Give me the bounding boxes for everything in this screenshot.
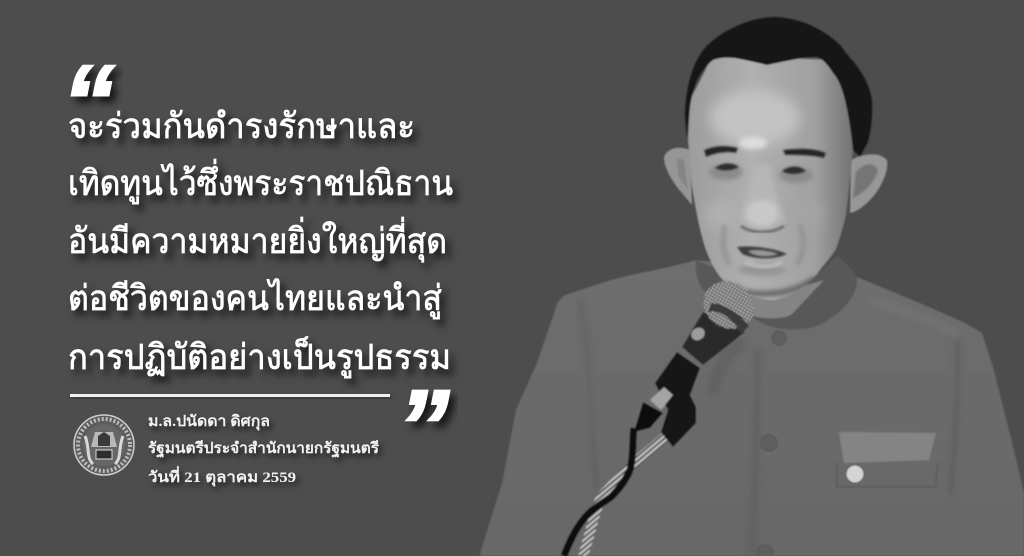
cable — [564, 428, 634, 556]
pin — [846, 465, 864, 483]
gooseneck — [583, 432, 671, 556]
opening quote mark: “ — [62, 44, 115, 161]
mouth — [737, 246, 787, 266]
quote text: อันมีความหมายยิ่งใหญ่ที่สุด — [68, 217, 447, 262]
attribution text: รัฐมนตรีประจำสำนักนายกรัฐมนตรี — [148, 440, 380, 458]
quote text: ต่อชีวิตของคนไทยและนำสู่ — [68, 278, 442, 319]
forehead highlight — [710, 90, 800, 146]
quote text: จะร่วมกันดำรงรักษาและ — [68, 107, 415, 146]
smile lines and chin — [723, 225, 803, 265]
neck — [722, 280, 824, 318]
microphone head — [695, 272, 763, 338]
microphone plug — [634, 402, 663, 432]
divider line — [70, 394, 390, 397]
nose shading — [762, 168, 784, 224]
face — [686, 56, 854, 300]
pocket square — [839, 432, 936, 463]
left ear — [664, 148, 692, 205]
closing quote mark: ” — [397, 369, 450, 486]
quote text: เทิดทูนไว้ซึ่งพระราชปณิธาน — [68, 159, 453, 204]
person photo — [470, 17, 1024, 556]
buttons — [757, 331, 786, 556]
microphone body — [682, 312, 745, 365]
quote text: การปฏิบัติอย่างเป็นรูปธรรม — [68, 336, 451, 378]
collar — [696, 256, 857, 330]
eyes — [715, 163, 806, 174]
hair — [685, 17, 872, 157]
microphone connector — [650, 387, 673, 410]
quote text — [68, 107, 453, 378]
eye sockets — [709, 164, 743, 180]
eyebrows — [704, 146, 826, 158]
attribution text: ม.ล.ปนัดดา ดิศกุล — [148, 412, 270, 431]
government seal icon — [74, 415, 134, 475]
attribution text — [148, 412, 380, 487]
pocket — [837, 463, 938, 487]
jacket — [470, 250, 1024, 556]
attribution text: วันที่ 21 ตุลาคม 2559 — [148, 466, 296, 487]
microphone bracket and clip — [655, 352, 700, 447]
cheeks — [708, 207, 724, 223]
right ear — [850, 154, 887, 213]
